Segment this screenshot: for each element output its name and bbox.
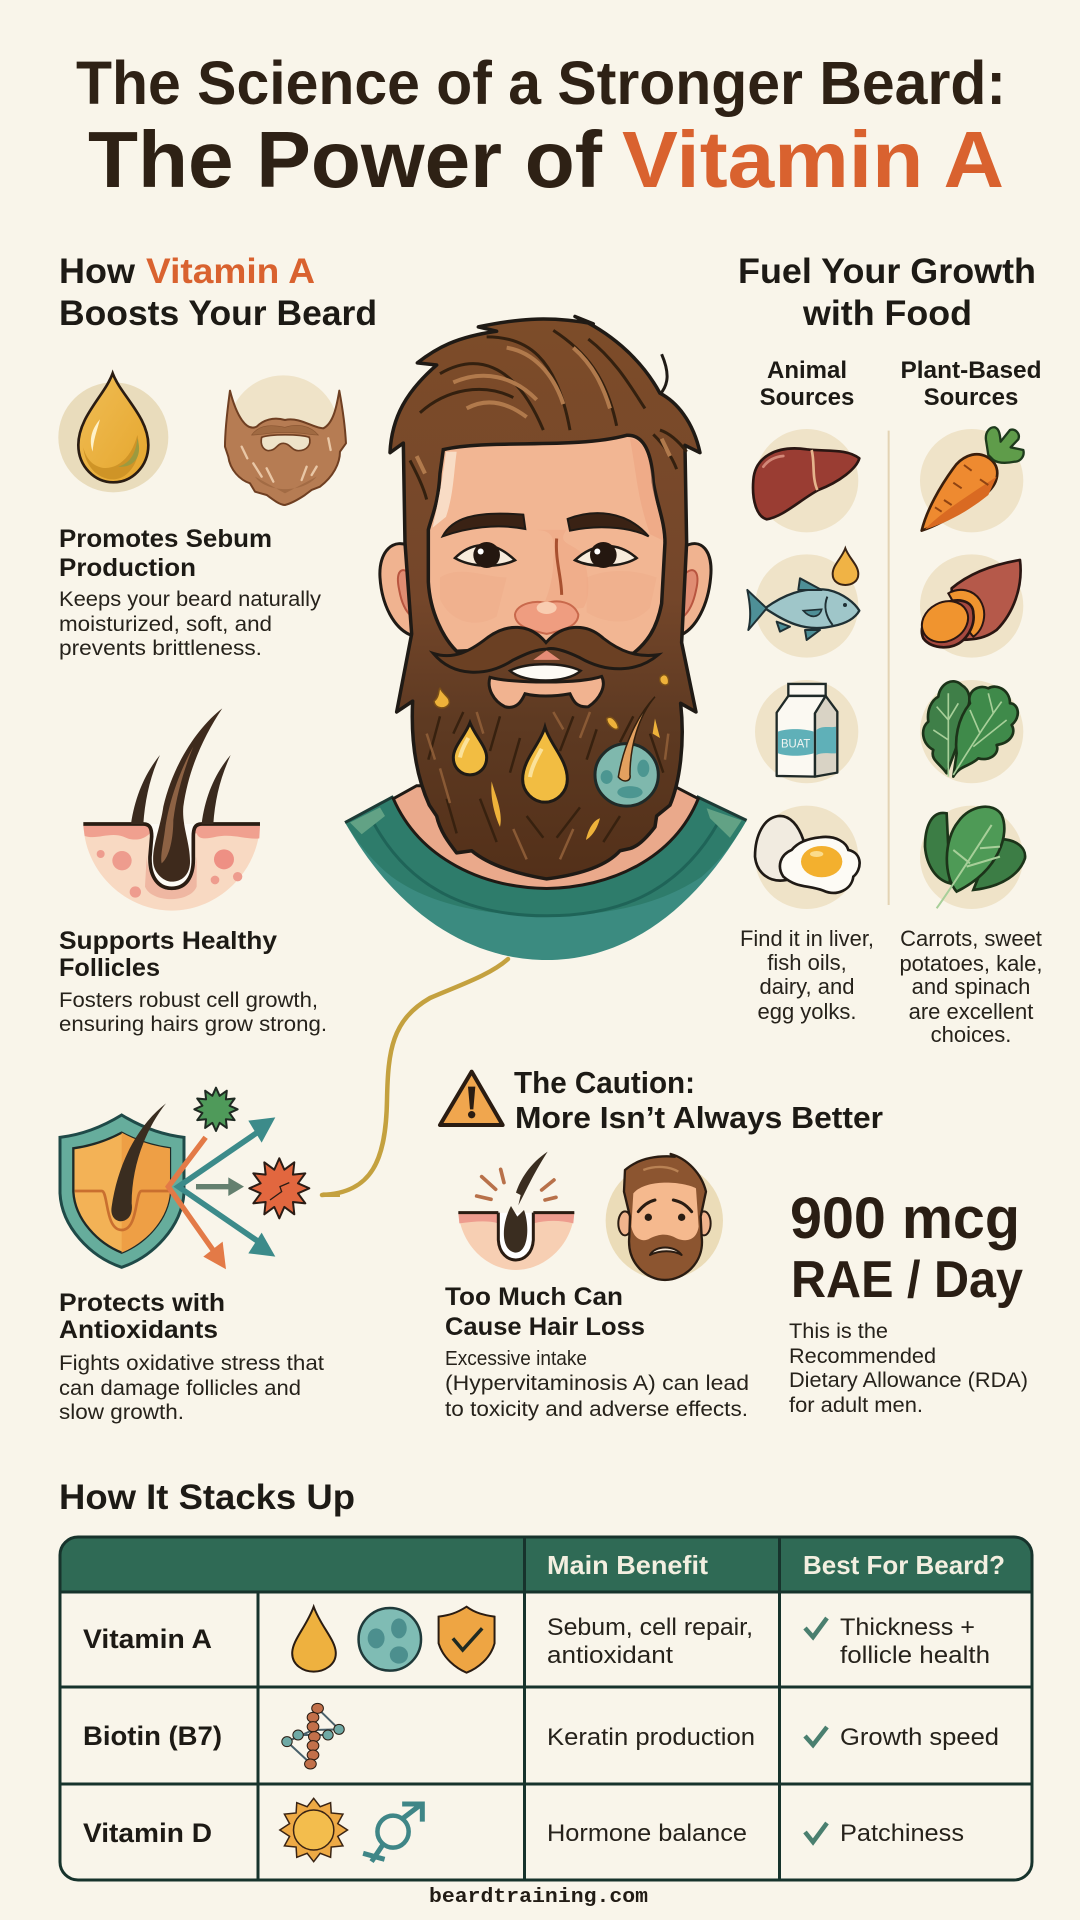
- column heading: animal sources: [760, 357, 854, 411]
- row: vitamin D: Hormone balance: [547, 1820, 747, 1847]
- text: supports healthy follicles: [59, 927, 327, 1036]
- row icons: drop, cell, shield: [292, 1607, 495, 1673]
- hair and beard: [390, 316, 700, 879]
- row: vitamin A: [83, 1607, 990, 1673]
- table grid: [60, 1537, 1032, 1880]
- icon: sebum oil drop: [58, 373, 168, 492]
- text: animal source foods: egg yolks.: [757, 999, 857, 1024]
- heading: the caution: [514, 1065, 883, 1135]
- text: animal source foods: [740, 926, 874, 1024]
- heading: how vitamin A boosts your beard: [59, 252, 377, 333]
- icon: sweet potato: [915, 554, 1023, 658]
- row: biotin: [83, 1703, 999, 1769]
- nose: [515, 539, 578, 634]
- heading: how vitamin A boosts your beard: How: [59, 252, 136, 291]
- title: The Science of a Stronger Beard:: [76, 49, 1006, 117]
- text: animal source foods: fish oils,: [767, 950, 847, 975]
- icon: eggs: [755, 806, 860, 909]
- eyebrows: [443, 513, 649, 536]
- stat: 900 mcg RAE per day: 900 mcg: [790, 1186, 1020, 1251]
- row: vitamin D: Vitamin D: [83, 1818, 212, 1848]
- row: vitamin A: antioxidant: [547, 1642, 673, 1669]
- row: vitamin D: Patchiness: [840, 1820, 964, 1847]
- heading: how it stacks up: How It Stacks Up: [59, 1478, 355, 1517]
- icon: carrot: [920, 427, 1024, 532]
- stat: 900 mcg RAE per day: [790, 1186, 1023, 1309]
- text: supports healthy follicles: Fosters robust cell growth,: [59, 989, 318, 1012]
- text: plant source foods: and spinach: [912, 974, 1030, 999]
- mouth and chin: [489, 650, 603, 707]
- row icon: molecule: [282, 1703, 344, 1769]
- text: promotes sebum production: prevents brittleness.: [59, 637, 262, 660]
- icon: worried man: [606, 1154, 723, 1280]
- text: protects with antioxidants: Fights oxidative stress that: [59, 1352, 324, 1375]
- oil drops in beard: [434, 675, 669, 840]
- comparison table: [60, 1537, 1032, 1880]
- column heading: plant-based sources: Plant-Based: [900, 357, 1042, 384]
- text: supports healthy follicles: ensuring hairs grow strong.: [59, 1013, 327, 1036]
- text: plant source foods: potatoes, kale,: [899, 951, 1043, 976]
- heading: the caution: The Caution:: [514, 1065, 695, 1100]
- row: vitamin D: [83, 1798, 964, 1862]
- food icons: [747, 427, 1025, 909]
- arrow: connector curve from shirt to shield icon: [322, 959, 508, 1195]
- heading: fuel your growth with food: Fuel Your Growth: [738, 252, 1036, 291]
- text: plant source foods: [899, 926, 1043, 1047]
- icon: beard: [225, 375, 346, 505]
- text: protects with antioxidants: can damage follicles and: [59, 1377, 301, 1400]
- icon: antioxidant shield deflecting free radicals: [60, 1088, 340, 1269]
- text: recommended dietary allowance: for adult men.: [789, 1394, 923, 1417]
- row: vitamin A: Sebum, cell repair,: [547, 1614, 753, 1641]
- follicle cell in beard: [595, 697, 658, 806]
- title: [76, 49, 1006, 204]
- icon: liver: [753, 429, 859, 532]
- text: recommended dietary allowance: Recommended: [789, 1345, 936, 1368]
- text: promotes sebum production: Production: [59, 554, 196, 582]
- text: too much can cause hair loss: to toxicity and adverse effects.: [445, 1398, 748, 1421]
- text: plant source foods: are excellent: [909, 999, 1033, 1024]
- column heading: plant-based sources: [900, 357, 1042, 411]
- table header: [60, 1537, 1032, 1592]
- column heading: plant-based sources: Sources: [924, 384, 1018, 411]
- heading: fuel your growth with food: [738, 252, 1036, 333]
- moustache: [433, 627, 658, 672]
- text: too much can cause hair loss: Cause Hair Loss: [445, 1313, 645, 1341]
- text: animal source foods: dairy, and: [760, 974, 854, 999]
- text: supports healthy follicles: Follicles: [59, 954, 160, 982]
- text: promotes sebum production: moisturized, soft, and: [59, 613, 272, 636]
- row: vitamin A: Thickness +: [840, 1614, 975, 1641]
- icon: healthy follicle: [83, 708, 260, 911]
- shirt: [345, 797, 747, 960]
- row: biotin: Growth speed: [840, 1724, 999, 1751]
- row icons: sun and gender symbol: [280, 1798, 422, 1862]
- text: recommended dietary allowance: Dietary Allowance (RDA): [789, 1369, 1028, 1392]
- table header: Best For Beard?: [803, 1550, 1005, 1580]
- footer: source url: beardtraining.com: [429, 1886, 648, 1909]
- text: promotes sebum production: [59, 525, 322, 660]
- row: biotin: Keratin production: [547, 1724, 755, 1751]
- text: protects with antioxidants: slow growth.: [59, 1401, 184, 1424]
- icon: warning triangle: [440, 1072, 503, 1125]
- heading: fuel your growth with food: with Food: [802, 294, 972, 333]
- text: plant source foods: choices.: [931, 1022, 1011, 1047]
- text: too much can cause hair loss: Too Much Can: [445, 1283, 623, 1311]
- icon: kale: [920, 680, 1023, 783]
- icon: fish with oil drop: [747, 548, 859, 658]
- icon: damaged follicle: [458, 1152, 574, 1270]
- text: recommended dietary allowance: This is the: [789, 1320, 888, 1343]
- text: promotes sebum production: Promotes Sebum: [59, 525, 272, 553]
- text: recommended dietary allowance: [789, 1320, 1028, 1417]
- table header: Main Benefit: [547, 1550, 708, 1580]
- heading: the caution: More Isn’t Always Better: [515, 1100, 883, 1135]
- ears: [380, 544, 711, 636]
- text: supports healthy follicles: Supports Healthy: [59, 927, 277, 955]
- heading: how vitamin A boosts your beard: Boosts Your Beard: [59, 294, 377, 333]
- heading: how vitamin A boosts your beard: Vitamin A: [146, 252, 315, 291]
- column heading: animal sources: Animal: [767, 357, 847, 384]
- text: too much can cause hair loss: (Hypervitaminosis A) can lead: [445, 1372, 749, 1395]
- icon: spinach: [920, 806, 1025, 909]
- text: protects with antioxidants: Antioxidants: [59, 1316, 218, 1344]
- text: plant source foods: Carrots, sweet: [900, 926, 1042, 951]
- title: The Power of: [88, 115, 602, 204]
- illustration: bearded man: [345, 316, 747, 960]
- neck: [393, 786, 698, 888]
- text: too much can cause hair loss: Excessive intake: [445, 1348, 587, 1370]
- text: animal source foods: Find it in liver,: [740, 926, 874, 951]
- text: promotes sebum production: Keeps your beard naturally: [59, 588, 322, 611]
- stat: 900 mcg RAE per day: RAE / Day: [791, 1251, 1023, 1309]
- column heading: animal sources: Sources: [760, 384, 854, 411]
- row: vitamin A: Vitamin A: [83, 1624, 212, 1654]
- icon: milk carton: [755, 680, 858, 783]
- title: Vitamin A: [622, 115, 1004, 204]
- text: protects with antioxidants: [59, 1289, 324, 1424]
- row: biotin: Biotin (B7): [83, 1721, 222, 1751]
- text: protects with antioxidants: Protects with: [59, 1289, 225, 1317]
- face: [428, 435, 665, 653]
- eyes: [455, 542, 637, 568]
- icon: milk carton: BUAT: [781, 736, 811, 750]
- text: too much can cause hair loss: [445, 1283, 749, 1421]
- row: vitamin A: follicle health: [840, 1642, 990, 1669]
